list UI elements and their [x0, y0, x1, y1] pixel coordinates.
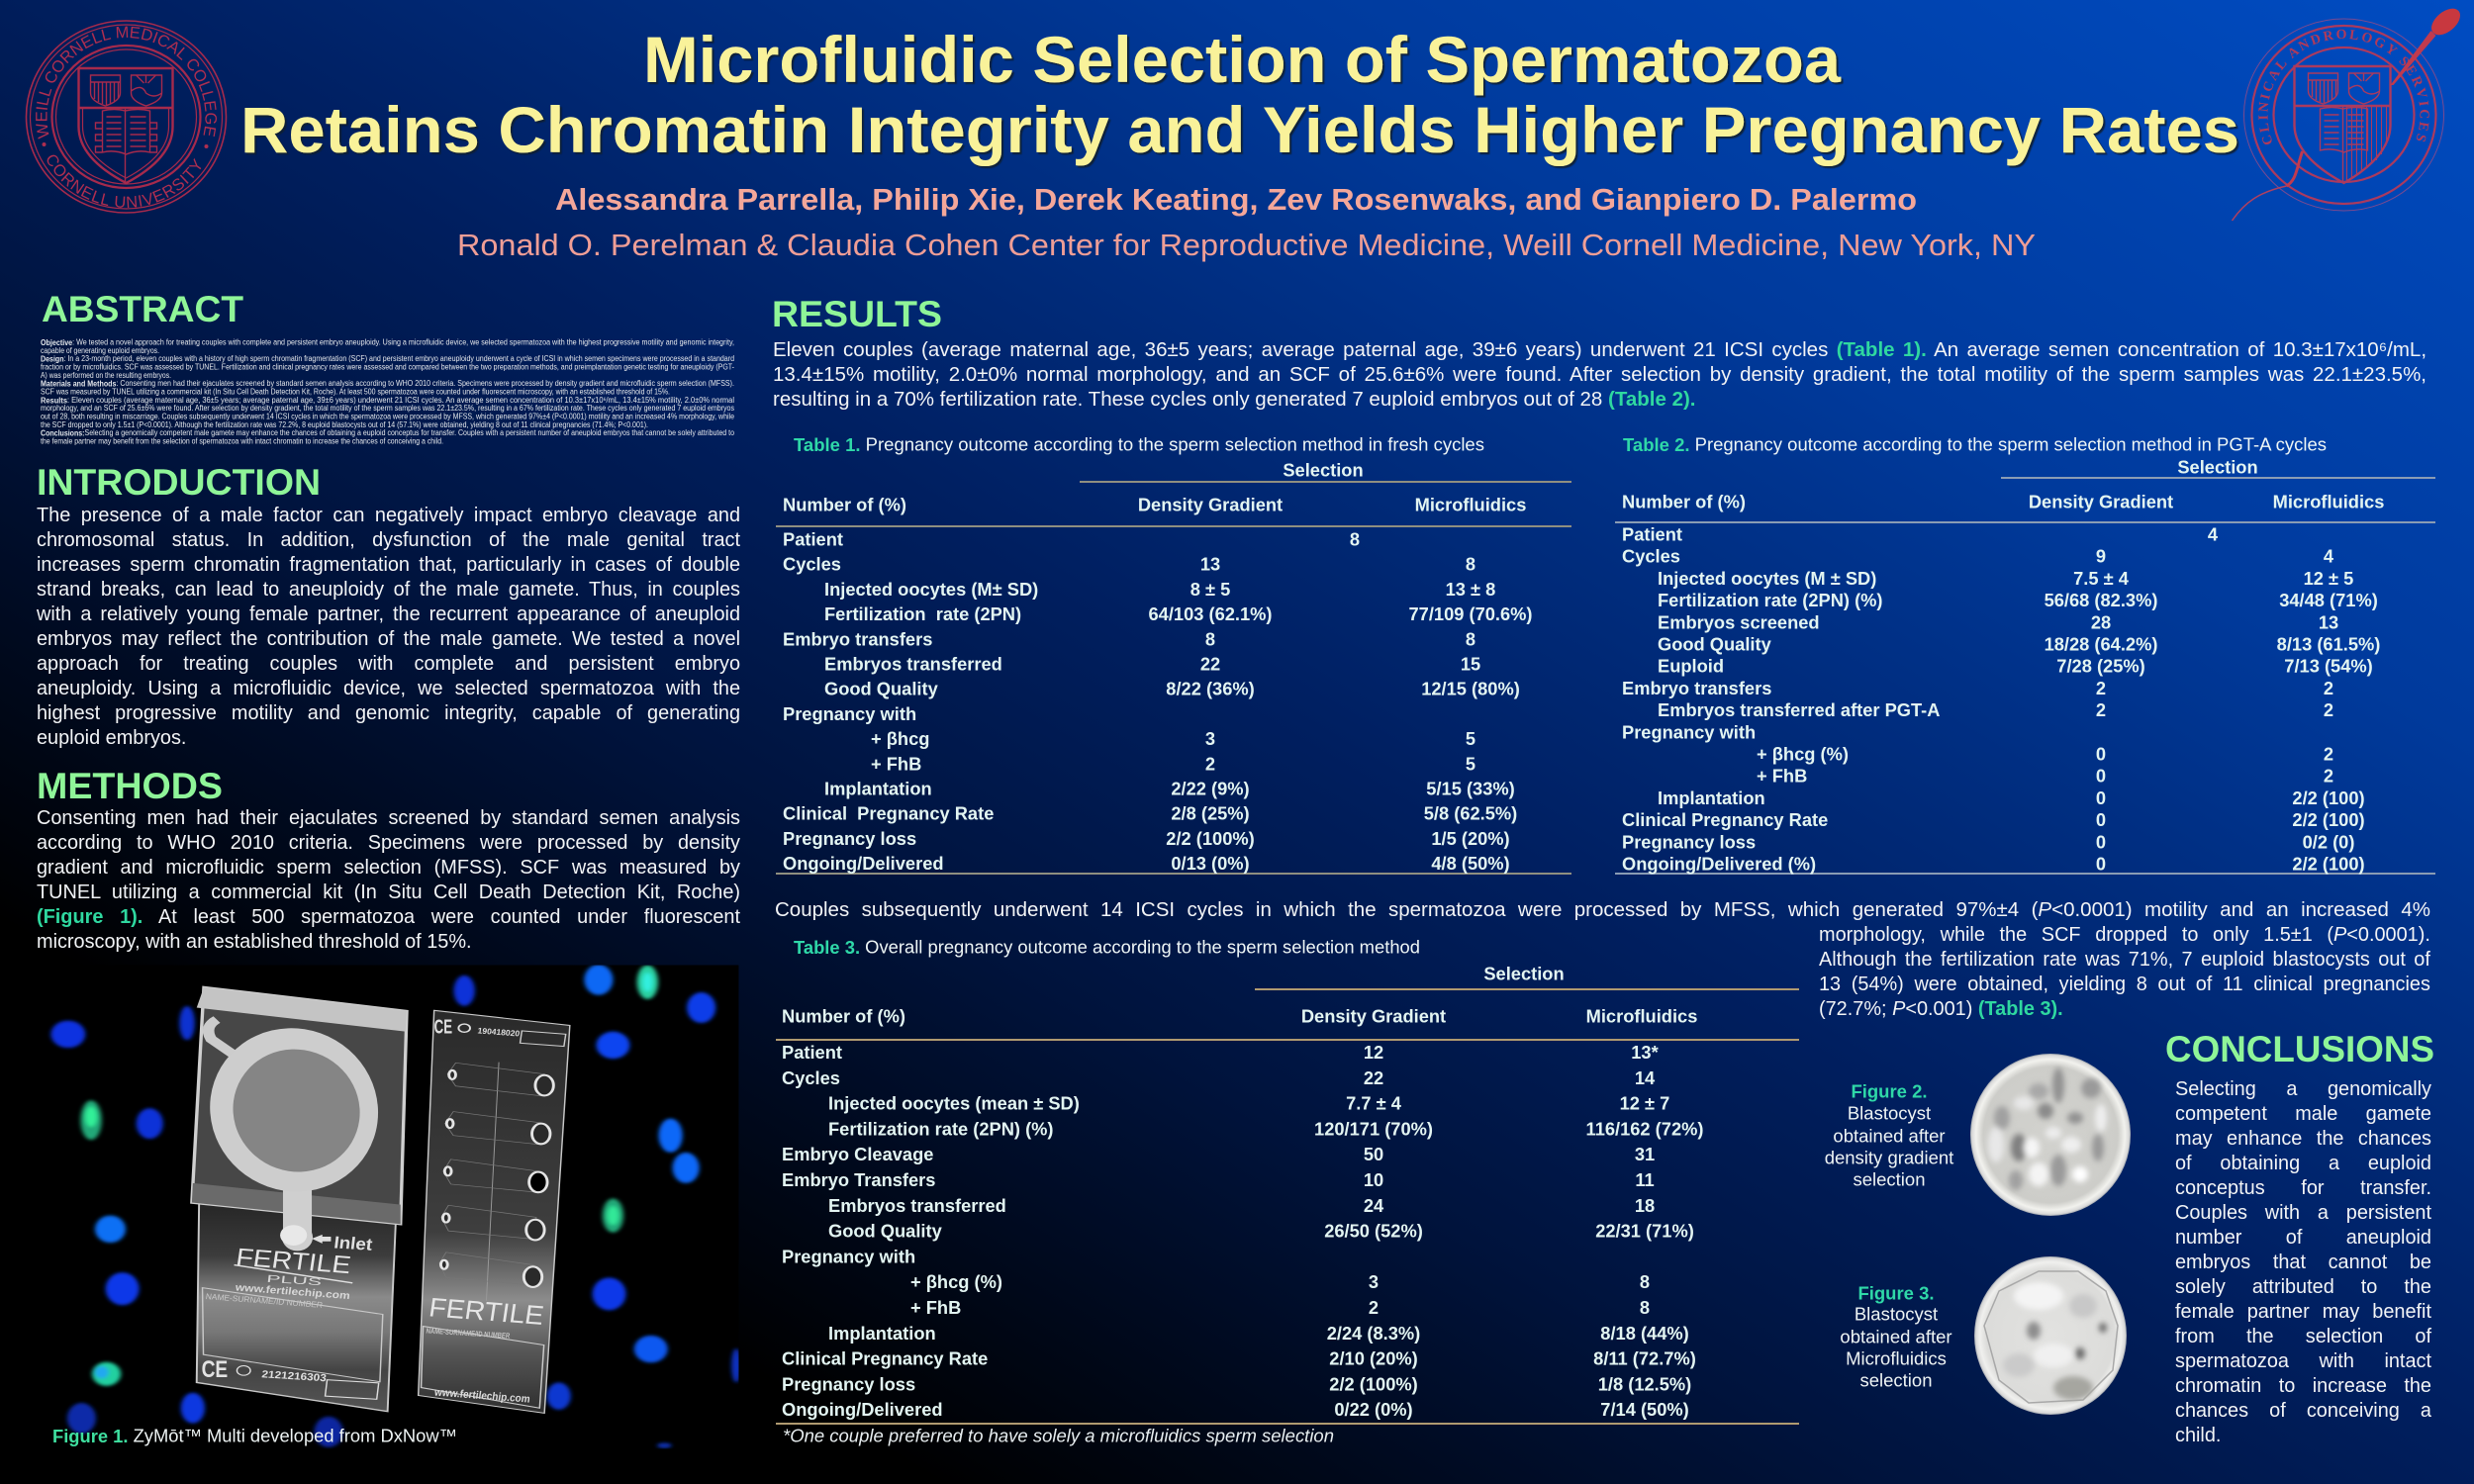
table 1: 8: [1466, 554, 1475, 575]
introduction text: chromosomal status. In addition, dysfunction of the male genital tract: [37, 528, 740, 550]
table 3: 2/2 (100%): [1329, 1373, 1418, 1394]
table 3: + FhB: [910, 1297, 961, 1318]
title: Microfluidic Selection of Spermatozoa: [643, 23, 1842, 96]
device: Fertile Plus chip: www.fertilechip.com: [234, 1281, 351, 1301]
fluorescent sperm heads: [50, 965, 741, 1448]
table 1: 8: [1205, 628, 1215, 649]
results text: resulting in a 70% fertilization rate. These cycles only generated 7 euploid embryos out of 28 (Table 2).: [773, 388, 1696, 410]
table 3: Injected oocytes (mean ± SD): [828, 1093, 1080, 1114]
device: Fertile Plus chip: [192, 987, 407, 1412]
table 3: 8/18 (44%): [1600, 1323, 1689, 1344]
table 2: 2/2 (100): [2292, 853, 2365, 875]
methods text: TUNEL utilizing a commercial kit (In Situ Cell Death Detection Kit, Roche): [37, 881, 740, 902]
table 3 footnote: *One couple preferred to have solely a microfluidics sperm selection: [783, 1425, 1334, 1446]
abstract text: SCF was measured by TUNEL utilizing a commercial kit (In Situ Cell Death Detection Kit, Roche). At least 500 spermatozoa were counted under fluorescent microscopy, with an established threshold of 15%.: [41, 388, 670, 396]
table 3: Embryo Transfers: [782, 1169, 935, 1190]
device: Fertile Plus chip: FERTILE: [235, 1244, 352, 1279]
table 2: 2: [2324, 744, 2333, 764]
methods text: Consenting men had their ejaculates screened by standard semen analysis: [37, 805, 740, 829]
table 2: + βhcg (%): [1757, 744, 1849, 764]
table 2: 7.5 ± 4: [2073, 568, 2130, 589]
affiliation: Ronald O. Perelman & Claudia Cohen Center for Reproductive Medicine, Weill Cornell Medicine, New York, NY: [457, 228, 2036, 262]
table 1: 13 ± 8: [1446, 579, 1495, 600]
figure 2 caption: obtained after: [1833, 1126, 1946, 1146]
table 3: Embryo Cleavage: [782, 1144, 933, 1164]
table 2: 12 ± 5: [2304, 568, 2353, 589]
table 1: 3: [1205, 728, 1215, 749]
figure 3 caption: [1840, 1282, 1952, 1391]
table 1: Selection: [1283, 459, 1364, 481]
table 1: + βhcg: [871, 728, 929, 749]
table 3: 13*: [1631, 1042, 1660, 1063]
table 1: Good Quality: [824, 679, 939, 699]
figure 2: blastocyst, density gradient: [1970, 1054, 2131, 1216]
figure 3 caption: selection: [1859, 1369, 1933, 1391]
figure 3 caption: Figure 3.: [1857, 1282, 1935, 1304]
methods text: microscopy, with an established threshold of 15%.: [37, 930, 472, 952]
table 3: Embryos transferred: [828, 1195, 1006, 1216]
title: [240, 23, 2239, 166]
table 3: Fertilization rate (2PN) (%): [828, 1118, 1054, 1139]
table 3: 7/14 (50%): [1600, 1399, 1689, 1420]
table 3: 18: [1635, 1195, 1655, 1216]
conclusions text: Selecting a genomically: [2175, 1076, 2431, 1100]
table 3: 120/171 (70%): [1314, 1118, 1433, 1139]
abstract text: morphology, and an SCF of 25.6±6% were found. After selection by density gradient, the total motility of the sperm samples was 22.1±23.5%, resulting in a 67% fertilization rate. These cycles only generated 7 euploid embryos: [41, 404, 734, 413]
table 1: Cycles: [783, 554, 841, 575]
results text: Eleven couples (average maternal age, 36±5 years; average paternal age, 39±6 years) underwent 21 ICSI cycles (Table 1). An average semen concentration of 10.3±17x10⁶/mL,: [773, 338, 2426, 360]
table 2: 2: [2324, 766, 2333, 787]
introduction text: approach for treating couples with complete and persistent embryo: [37, 651, 740, 675]
abstract text: capable of generating euploid embryos.: [41, 346, 159, 355]
title: Retains Chromatin Integrity and Yields Higher Pregnancy Rates: [240, 93, 2239, 166]
table 2: 18/28 (64.2%): [2045, 633, 2157, 655]
table 3: Clinical Pregnancy Rate: [782, 1348, 988, 1369]
device: Fertile chip with five channels: NAME-SURNAME/ID NUMBER: [426, 1327, 511, 1340]
results text, beside table 3: (72.7%; P<0.001) (Table 3).: [1819, 997, 2063, 1019]
table 2: + FhB: [1757, 766, 1807, 787]
table 2: 7/28 (25%): [2056, 656, 2145, 677]
table 1: 8 ± 5: [1190, 579, 1230, 600]
table 3: + βhcg (%): [910, 1271, 1002, 1292]
table 2: 34/48 (71%): [2279, 590, 2378, 610]
device: Fertile Plus chip: Inlet: [333, 1234, 373, 1254]
conclusions text: may enhance the chances: [2175, 1126, 2431, 1150]
table 2: Patient: [1622, 524, 1682, 544]
table 2 caption: Table 2. Pregnancy outcome according to the sperm selection method in PGT-A cycles: [1623, 433, 2327, 455]
table 3: 31: [1635, 1144, 1655, 1164]
table 1: Embryos transferred: [824, 653, 1002, 675]
table 2: Embryos transferred after PGT-A: [1658, 699, 1940, 720]
table 2: Clinical Pregnancy Rate: [1622, 809, 1828, 830]
results text: [773, 338, 2426, 410]
device: Fertile Plus chip: 2121216303: [261, 1368, 327, 1384]
table 2: 2: [2096, 678, 2106, 698]
conclusions text: from the selection of: [2175, 1324, 2431, 1347]
table 1: 5/15 (33%): [1426, 778, 1515, 799]
abstract text: the SCF dropped to only 1.5±1 (P<0.0001). Although the fertilization rate was 72.2%, 8 euploid blastocysts out of 14 (57.1%) were obtained, yielding 8 out of 11 clinical pregnancies (71.4%; P<0.001).: [41, 420, 648, 429]
heading: results: RESULTS: [772, 294, 942, 334]
table 3: 116/162 (72%): [1586, 1118, 1703, 1139]
table 2: 0: [2096, 766, 2106, 787]
table 3: 11: [1635, 1169, 1655, 1190]
table 2: 0: [2096, 831, 2106, 852]
table 3: 24: [1364, 1195, 1384, 1216]
table 1: 64/103 (62.1%): [1148, 603, 1273, 624]
table 3: 8: [1640, 1271, 1650, 1292]
figure 2 caption: [1825, 1080, 1953, 1189]
results text, beside table 3: morphology, while the SCF dropped to only 1.5±1 (P<0.0001).: [1819, 922, 2430, 946]
conclusions text: chances of conceiving a: [2175, 1399, 2431, 1421]
abstract text: Materials and Methods: Consenting men had their ejaculates screened by standard semen analysis according to WHO 2010 criteria. Specimens were processed by density gradient and microfluidic sperm selection (MFSS).: [41, 379, 734, 388]
introduction text: increases sperm chromatin fragmentation that, particularly in cases of double: [37, 552, 740, 576]
figure 2 caption: density gradient: [1825, 1148, 1953, 1167]
introduction text: [37, 503, 740, 748]
table 1 caption: Table 1. Pregnancy outcome according to the sperm selection method in fresh cycles: [794, 433, 1484, 455]
table 2: 7/13 (54%): [2284, 656, 2373, 677]
abstract text: Results: Eleven couples (average maternal age, 36±5 years; average paternal age, 39±6 years) underwent 21 ICSI cycles. An average semen concentration of 10.3±17x10⁶/mL, 13.4±15% motility, 2.0±0% normal: [41, 396, 734, 405]
table 3: Patient: [782, 1042, 842, 1063]
results text: 13.4±15% motility, 2.0±0% normal morphology, and an SCF of 25.6±6% were found. After selection by density gradient, the total motility of the sperm samples was 22.1±23.5%,: [773, 362, 2426, 386]
table 2: 2/2 (100): [2292, 809, 2365, 830]
introduction text: The presence of a male factor can negatively impact embryo cleavage and: [37, 503, 740, 526]
table 3: 12: [1364, 1042, 1383, 1063]
results text, beside table 3: [1819, 922, 2430, 1019]
table 3: Ongoing/Delivered: [782, 1399, 943, 1420]
table 2: Number of (%): [1622, 491, 1746, 512]
introduction text: embryos may reflect the contribution of the male gamete. We tested a novel: [37, 627, 740, 649]
table 2: 2/2 (100): [2292, 788, 2365, 808]
introduction text: strand breaks, can lead to aneuploidy of the male gamete. Thus, in couples: [37, 578, 740, 600]
table 3: 22/31 (71%): [1595, 1221, 1694, 1242]
table 3: Number of (%): [782, 1005, 905, 1027]
table 2: Cycles: [1622, 546, 1680, 567]
table 2: 28: [2091, 611, 2111, 632]
table 1: 4/8 (50%): [1431, 853, 1510, 874]
table 2: Selection: [2177, 457, 2258, 477]
figure 3 caption: Blastocyst: [1855, 1304, 1938, 1324]
device: Fertile Plus chip: PLUS: [266, 1273, 323, 1288]
table 3: 0/22 (0%): [1334, 1399, 1413, 1420]
table 2: Euploid: [1658, 656, 1724, 677]
table 1: 2/2 (100%): [1166, 828, 1255, 849]
abstract text: Design: In a 23-month period, eleven couples with a history of high sperm chromatin fragmentation (SCF) and persistent embryo aneuploidy underwent a cycle of ICSI in which semen specimens were processed in a standard: [41, 354, 734, 363]
table 2: 4: [2324, 546, 2334, 567]
conclusions text: spermatozoa with intact: [2175, 1349, 2431, 1371]
abstract text: fraction or by microfluidics. SCF was assessed by TUNEL. Fertilization and clinical pregnancy rates were assessed and compared between the two preparation methods, and preimplantation genetic testing for aneuploidy (PGT-: [41, 362, 734, 372]
table 3: Good Quality: [828, 1221, 943, 1242]
abstract text: the female partner may benefit from the selection of spermatozoa with intact chromatin to increase the chances of conceiving a child.: [41, 437, 443, 445]
table 1: 2: [1205, 753, 1215, 774]
table 3: 2/10 (20%): [1329, 1348, 1418, 1369]
table 2: Pregnancy loss: [1622, 831, 1756, 852]
table 1: 1/5 (20%): [1431, 828, 1510, 849]
table 3: Pregnancy with: [782, 1246, 915, 1266]
conclusions text: child.: [2175, 1423, 2221, 1446]
table 2: Good Quality: [1658, 633, 1772, 655]
table 3: 12 ± 7: [1620, 1093, 1669, 1114]
figure 2 caption: selection: [1853, 1169, 1926, 1189]
device: Fertile Plus chip: CE: [202, 1356, 228, 1383]
abstract text: out of 28, both resulting in miscarriage. Couples subsequently underwent 14 ICSI cycles in which the spermatozoa were processed by MFSS, which generated 97%±4 (P<0.0001) motility and an increased 4% morphology, while: [41, 412, 734, 421]
table 1: 12/15 (80%): [1421, 679, 1520, 699]
table 2: 0: [2096, 788, 2106, 808]
heading: methods: METHODS: [37, 766, 223, 806]
table 1: 2/22 (9%): [1171, 778, 1250, 799]
results text, beside table 3: 13 (54%) were obtained, yielding 8 out of 11 clinical pregnancies: [1819, 972, 2430, 995]
table 1: 5: [1466, 753, 1475, 774]
table 2: Ongoing/Delivered (%): [1622, 853, 1816, 875]
device: Fertile chip with five channels: www.fertilechip.com: [433, 1386, 531, 1405]
table 3: 3: [1369, 1271, 1379, 1292]
conclusions text: competent male gamete: [2175, 1102, 2431, 1124]
table 3: Density Gradient: [1301, 1005, 1446, 1027]
methods text: gradient and microfluidic sperm selection (MFSS). SCF was measured by: [37, 855, 740, 879]
abstract text: Conclusions:Selecting a genomically competent male gamete may enhance the chances of obtaining a euploid conceptus for transfer. Couples with a persistent number of aneuploid embryos that cannot be solely attributed to: [41, 428, 735, 437]
table 2: Embryos screened: [1658, 611, 1820, 632]
figure 3: blastocyst, microfluidics: [1974, 1256, 2127, 1415]
introduction text: with a relatively young female partner, the recurrent appearance of aneuploid: [37, 602, 740, 625]
table 1: 13: [1200, 554, 1220, 575]
methods text: (Figure 1). At least 500 spermatozoa were counted under fluorescent: [37, 904, 740, 928]
table 1: 8: [1466, 628, 1475, 649]
table 1: Number of (%): [783, 495, 906, 514]
table 2: Pregnancy with: [1622, 721, 1756, 742]
table 3: Microfluidics: [1586, 1005, 1697, 1027]
table 3: 2/24 (8.3%): [1327, 1323, 1420, 1344]
abstract text: A) was performed on the resulting embryos.: [41, 371, 171, 380]
table 3: 1/8 (12.5%): [1598, 1373, 1691, 1394]
device: Fertile chip with five channels: CE: [434, 1015, 452, 1038]
table 3: Selection: [1483, 964, 1565, 983]
device: Fertile Plus chip: NAME-SURNAME/ID NUMBER: [205, 1292, 324, 1310]
table 1: [776, 433, 1571, 874]
table 3: 2: [1369, 1297, 1379, 1318]
table 2: [1615, 433, 2435, 875]
heading: abstract: ABSTRACT: [42, 289, 243, 329]
figure 2 caption: Blastocyst: [1848, 1102, 1931, 1124]
table 2: Embryo transfers: [1622, 678, 1771, 698]
methods text: according to WHO 2010 criteria. Specimens were processed by density: [37, 831, 740, 853]
table 3: 7.7 ± 4: [1346, 1093, 1402, 1114]
table 1: 0/13 (0%): [1171, 853, 1250, 874]
table 1: Patient: [783, 528, 843, 550]
abstract text: [41, 338, 735, 445]
introduction text: aneuploidy. Using a microfluidic device, we selected spermatozoa with the: [37, 677, 740, 698]
table 2: Injected oocytes (M ± SD): [1658, 568, 1876, 589]
table 3 caption: Table 3. Overall pregnancy outcome according to the sperm selection method: [794, 936, 1420, 958]
table 1: Fertilization rate (2PN): [824, 603, 1021, 624]
table 2: 2: [2096, 699, 2106, 720]
panel: abstract: [41, 289, 735, 445]
table 1: 22: [1200, 653, 1220, 675]
table 1: Microfluidics: [1415, 495, 1526, 514]
table 3: 8: [1640, 1297, 1650, 1318]
figure 3 caption: obtained after: [1840, 1326, 1952, 1347]
table 3: 8/11 (72.7%): [1593, 1348, 1696, 1369]
table 1: 5/8 (62.5%): [1424, 803, 1517, 824]
abstract text: Objective: We tested a novel approach for treating couples with complete and persistent embryo aneuploidy. Using a microfluidic device, we selected spermatozoa with the highest progressive motility and genomic integrity,: [41, 338, 734, 346]
table 2: Implantation: [1658, 788, 1765, 808]
figure 3 caption: Microfluidics: [1846, 1347, 1947, 1369]
authors: Alessandra Parrella, Philip Xie, Derek Keating, Zev Rosenwaks, and Gianpiero D. Palermo: [555, 182, 1917, 217]
conclusions text: conceptus for transfer.: [2175, 1175, 2431, 1199]
conclusions text: [2175, 1076, 2432, 1446]
table 2: 0: [2096, 744, 2106, 764]
table 3: 10: [1364, 1169, 1383, 1190]
table 3: 22: [1364, 1067, 1383, 1088]
table 1: Ongoing/Delivered: [783, 853, 944, 874]
results text, continued: Couples subsequently underwent 14 ICSI cycles in which the spermatozoa were processed by MFSS, which generated 97%±4 (P<0.0001) motility and an increased 4%: [775, 898, 2430, 920]
table 3: 26/50 (52%): [1324, 1221, 1423, 1242]
table 2: Density Gradient: [2029, 491, 2173, 512]
table 1: Embryo transfers: [783, 628, 932, 649]
table 2: 8/13 (61.5%): [2277, 633, 2380, 655]
table 2: 2: [2324, 678, 2333, 698]
introduction text: euploid embryos.: [37, 726, 186, 748]
results text, beside table 3: Although the fertilization rate was 71%, 7 euploid blastocysts out of: [1819, 948, 2430, 970]
table 1: Pregnancy loss: [783, 828, 916, 849]
logo: Clinical Andrology Services seal with sperm: CLINICAL ANDROLOGY SERVICES: [2258, 30, 2429, 144]
table 1: Implantation: [824, 778, 932, 799]
figure 1 caption: Figure 1. ZyMōt™ Multi developed from DxNow™: [52, 1425, 457, 1446]
conclusions text: of obtaining a euploid: [2175, 1152, 2431, 1173]
table 1: 8: [1350, 528, 1360, 550]
table 2: 56/68 (82.3%): [2045, 590, 2157, 610]
logo: Weill Cornell Medical College seal: [26, 20, 228, 214]
table 2: 4: [2208, 524, 2219, 544]
table 3: Pregnancy loss: [782, 1373, 915, 1394]
table 2: Fertilization rate (2PN) (%): [1658, 590, 1883, 610]
table 2: 9: [2096, 546, 2106, 567]
table 2: 0: [2096, 809, 2106, 830]
table 3: 14: [1635, 1067, 1656, 1088]
heading: introduction: INTRODUCTION: [37, 462, 321, 503]
conclusions text: solely attributed to the: [2175, 1274, 2431, 1298]
table 1: Clinical Pregnancy Rate: [783, 803, 994, 824]
table 3: Cycles: [782, 1067, 840, 1088]
table 2: 0: [2096, 853, 2106, 875]
logo: Clinical Andrology Services seal with sperm: [2232, 8, 2460, 222]
table 1: 77/109 (70.6%): [1408, 603, 1533, 624]
figure 2 caption: Figure 2.: [1851, 1080, 1928, 1102]
device: Fertile chip with five channels: FERTILE: [428, 1292, 546, 1331]
introduction text: highest progressive motility and genomic integrity, capable of generating: [37, 700, 740, 724]
table 3: [776, 936, 1799, 1446]
table 1: 8/22 (36%): [1166, 679, 1255, 699]
table 1: 2/8 (25%): [1171, 803, 1250, 824]
table 3: Implantation: [828, 1323, 936, 1344]
table 1: Density Gradient: [1138, 495, 1283, 514]
conclusions text: Couples with a persistent: [2175, 1201, 2431, 1223]
device: Fertile chip with five channels: 190418020: [477, 1027, 521, 1039]
table 1: + FhB: [871, 753, 921, 774]
table 1: Pregnancy with: [783, 703, 916, 724]
logo: Weill Cornell Medical College seal: WEILL CORNELL MEDICAL COLLEGE: [36, 26, 217, 139]
figure 1: microfluidic chips over fluorescent sperm: [0, 965, 741, 1449]
table 2: Microfluidics: [2273, 491, 2384, 512]
table 1: 15: [1461, 653, 1480, 675]
conclusions text: embryos that cannot be: [2175, 1251, 2431, 1272]
logo: Weill Cornell Medical College seal: CORNELL UNIVERSITY: [48, 154, 202, 208]
table 1: 5: [1466, 728, 1475, 749]
table 2: 0/2 (0): [2303, 831, 2354, 852]
conclusions text: chromatin to increase the: [2175, 1373, 2431, 1397]
table 2: 13: [2319, 611, 2338, 632]
methods text: [37, 805, 740, 952]
heading: conclusions: CONCLUSIONS: [2165, 1029, 2434, 1069]
conclusions text: number of aneuploid: [2175, 1225, 2431, 1249]
conclusions text: female partner may benefit: [2175, 1300, 2431, 1322]
device: Fertile chip with five channels: [419, 1010, 570, 1413]
table 1: Injected oocytes (M± SD): [824, 579, 1038, 600]
table 3: 50: [1364, 1144, 1383, 1164]
table 2: 2: [2324, 699, 2333, 720]
